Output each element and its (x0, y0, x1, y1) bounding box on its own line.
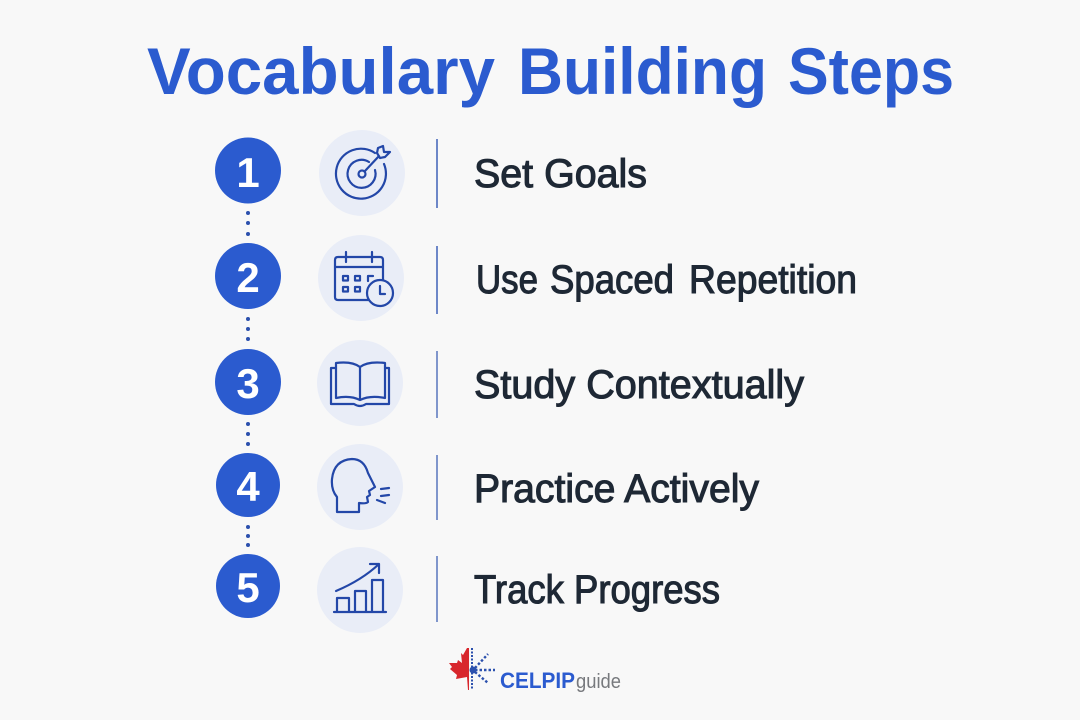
icon: target with arrow (319, 130, 405, 216)
label 5: Track Progress (474, 568, 720, 612)
title: Steps (788, 34, 954, 108)
dotted connector 2-3 (246, 317, 250, 341)
number badge 1 (215, 138, 281, 204)
label 3: Study Contextually (474, 363, 804, 407)
wordmark: CELPIP (500, 668, 575, 693)
label 2 (476, 258, 857, 302)
icon: maple leaf (449, 648, 469, 690)
wordmark (500, 668, 621, 693)
label 2: Use (476, 258, 538, 302)
step 5: track progress (216, 547, 720, 633)
title: Vocabulary (147, 34, 495, 108)
dotted connector 3-4 (246, 422, 250, 446)
title (147, 34, 954, 108)
icon: speaking head (317, 444, 403, 530)
title: Building (518, 34, 767, 108)
icon: growth chart (317, 547, 403, 633)
divider 3 (436, 351, 438, 418)
step 3: study contextually (215, 340, 804, 426)
divider 2 (436, 246, 438, 314)
number badge 3 (215, 349, 281, 415)
step 2: use spaced repetition (215, 235, 857, 321)
label 4: Practice Actively (474, 467, 759, 511)
number badge 1: 1 (236, 149, 260, 196)
step 1: set goals (215, 130, 647, 216)
dotted connector 4-5 (246, 525, 250, 547)
divider 1 (436, 139, 438, 208)
label 2: Repetition (689, 258, 857, 302)
number badge 4 (216, 453, 280, 517)
icon: starburst dots (470, 648, 495, 690)
step 4: practice actively (216, 444, 759, 530)
number badge 2 (215, 243, 281, 309)
number badge 5 (216, 554, 280, 618)
number badge 5: 5 (236, 564, 260, 611)
logo: CELPIP guide (449, 648, 621, 693)
dotted connector 1-2 (246, 211, 250, 236)
wordmark: guide (576, 671, 621, 693)
number badge 2: 2 (236, 254, 260, 301)
icon: calendar with clock (318, 235, 404, 321)
number badge 3: 3 (236, 360, 260, 407)
icon: open book (317, 340, 403, 426)
number badge 4: 4 (236, 463, 260, 510)
divider 5 (436, 556, 438, 622)
divider 4 (436, 455, 438, 520)
label 1: Set Goals (474, 152, 647, 196)
label 2: Spaced (550, 258, 674, 302)
